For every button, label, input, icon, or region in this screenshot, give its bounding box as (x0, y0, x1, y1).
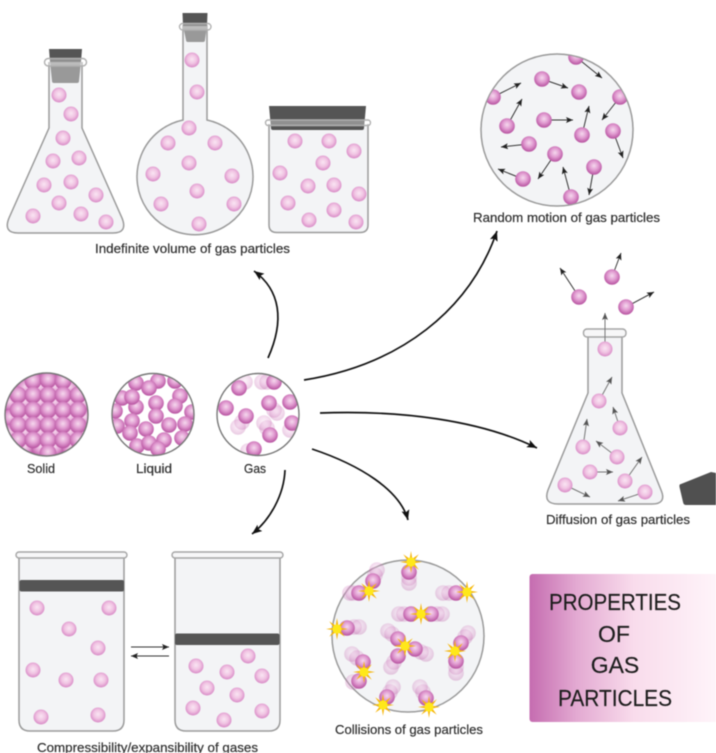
colliding particles (339, 564, 469, 706)
flask rim (584, 329, 626, 337)
solid circle (4, 372, 90, 458)
gas circle (217, 374, 300, 459)
expanded beaker (16, 552, 127, 731)
removed stopper (679, 472, 716, 505)
jar with lid (266, 106, 370, 232)
label: liquid: Liquid (136, 461, 172, 476)
collision sparks (326, 551, 478, 718)
escaping and moving particles (558, 253, 654, 501)
particle circle with arrows (481, 49, 633, 206)
arrow: gas to indefinite volume (254, 271, 278, 358)
panel: collisions of gas particles (326, 551, 484, 737)
conical flask with stopper (7, 49, 124, 233)
double arrows (131, 647, 169, 656)
title box: properties of gas particles: GAS (591, 652, 639, 678)
arrow: gas to diffusion (320, 412, 537, 448)
caption: indefinite volume: Indefinite volume of gas particles (95, 241, 291, 256)
arrow: gas to random motion (304, 231, 497, 380)
open flask (547, 337, 663, 504)
caption: diffusion: Diffusion of gas particles (546, 512, 691, 527)
caption: collisions: Collisions of gas particles (335, 722, 483, 737)
label: gas: Gas (244, 461, 266, 476)
title box: properties of gas particles (530, 574, 716, 722)
arrow: gas to collisions (312, 449, 408, 520)
panel: states of matter (2, 372, 300, 476)
compressed beaker (172, 552, 283, 731)
panel: random motion of gas particles (473, 49, 661, 225)
panel: diffusion of gas particles (546, 253, 716, 527)
collision circle (332, 560, 484, 712)
arrow: gas to compressibility (252, 470, 285, 534)
panel: compressibility and expansibility (16, 552, 283, 753)
caption: random motion: Random motion of gas particles (473, 210, 661, 225)
liquid circle (107, 373, 200, 457)
title box: properties of gas particles: PARTICLES (558, 685, 672, 711)
label: solid: Solid (27, 461, 55, 476)
panel: indefinite volume of gas particles (7, 13, 371, 256)
title box: properties of gas particles: OF (598, 621, 630, 647)
trailing ghost particles (342, 562, 476, 700)
round-bottom flask with stopper (137, 13, 253, 235)
title box: properties of gas particles: PROPERTIES (549, 589, 681, 615)
